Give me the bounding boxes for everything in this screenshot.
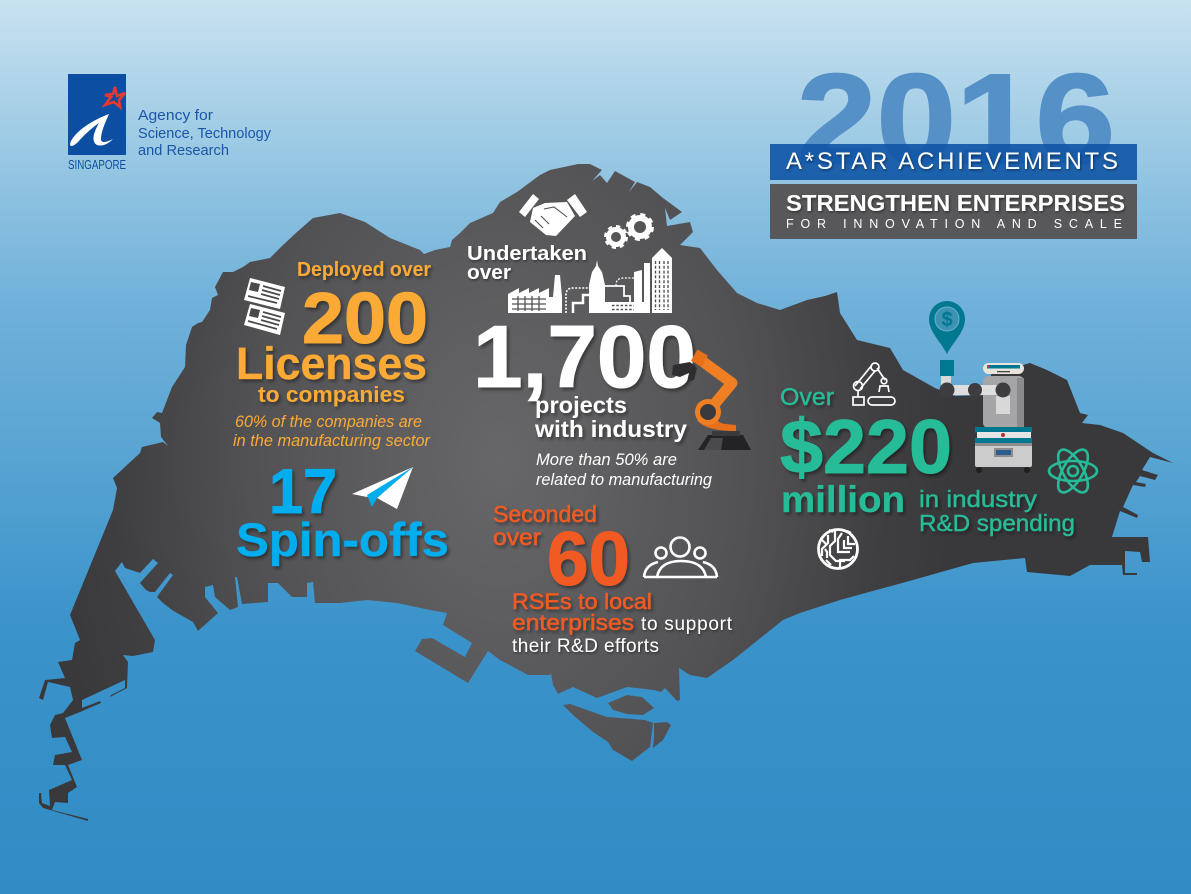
secondment detail: their R&D efforts bbox=[512, 636, 659, 657]
secondment detail bbox=[512, 614, 733, 657]
spending text: in industry bbox=[919, 486, 1038, 512]
banner: strengthen enterprises: STRENGTHEN ENTERPRISES bbox=[786, 190, 1125, 216]
banner: strengthen enterprises bbox=[770, 184, 1137, 239]
spending text: R&D spending bbox=[919, 510, 1075, 536]
number 1,700: 1,700 bbox=[473, 307, 696, 406]
agency name: Science, Technology bbox=[138, 125, 271, 142]
spending text: Over bbox=[780, 384, 834, 411]
projects text: projects bbox=[535, 392, 627, 418]
seconded text bbox=[493, 501, 652, 635]
projects text: with industry bbox=[534, 416, 687, 442]
agency name bbox=[138, 107, 271, 159]
title block bbox=[770, 48, 1137, 239]
spin-offs text: Spin-offs bbox=[236, 513, 449, 566]
secondment detail: to support bbox=[641, 614, 733, 635]
icon: robotic arm outline bbox=[853, 363, 895, 405]
seconded text: RSEs to local bbox=[512, 589, 652, 614]
licenses text: Deployed over bbox=[297, 259, 431, 281]
panel: R&D spending bbox=[780, 301, 1097, 568]
spin-offs text: 17 bbox=[269, 457, 337, 527]
licenses note: in the manufacturing sector bbox=[233, 432, 431, 450]
licenses text: Licenses bbox=[236, 338, 427, 389]
projects note: More than 50% are bbox=[536, 450, 677, 469]
icon: industrial skyline bbox=[508, 248, 672, 313]
seconded text: Seconded bbox=[493, 501, 597, 527]
icon: atom bbox=[1049, 445, 1097, 497]
icon: circuit globe bbox=[818, 530, 858, 568]
spending text bbox=[780, 384, 1075, 536]
map of Singapore bbox=[39, 164, 1173, 821]
icon: location pin with dollar bbox=[929, 301, 965, 354]
icon: documents bbox=[244, 278, 285, 335]
licenses note bbox=[233, 413, 431, 450]
icon: paper plane bbox=[352, 467, 413, 509]
undertaken text: Undertaken bbox=[467, 243, 587, 265]
agency name: and Research bbox=[138, 142, 229, 159]
seconded text: enterprises bbox=[512, 610, 634, 635]
licenses note: 60% of the companies are bbox=[235, 413, 422, 431]
projects text bbox=[534, 392, 687, 442]
undertaken text: over bbox=[467, 262, 511, 284]
panel: licenses bbox=[233, 259, 431, 450]
icon: orange robot arm bbox=[672, 349, 751, 450]
licenses text bbox=[236, 259, 431, 407]
banner: achievements: A*STAR ACHIEVEMENTS bbox=[786, 148, 1118, 175]
icon: location pin with dollar: $ bbox=[941, 309, 953, 331]
panel: spin-offs bbox=[236, 457, 449, 566]
projects note bbox=[536, 450, 713, 489]
logo wordmark SINGAPORE: SINGAPORE bbox=[68, 157, 126, 172]
icon: gears bbox=[606, 214, 652, 248]
spin-offs text bbox=[236, 457, 449, 566]
spending text: million bbox=[781, 479, 905, 520]
icon: service robot bbox=[940, 360, 1032, 473]
projects note: related to manufacturing bbox=[536, 470, 713, 489]
panel: secondment bbox=[493, 501, 733, 657]
licenses text: to companies bbox=[258, 382, 405, 407]
seconded text: 60 bbox=[547, 517, 630, 602]
agency name: Agency for bbox=[138, 107, 213, 124]
spending text: $220 bbox=[780, 405, 952, 490]
licenses text: 200 bbox=[302, 279, 428, 359]
undertaken text bbox=[467, 243, 587, 284]
banner: achievements bbox=[770, 144, 1137, 180]
icon: handshake bbox=[519, 194, 587, 236]
logo: A*STAR Singapore bbox=[68, 74, 271, 172]
seconded text: over bbox=[493, 524, 541, 550]
icon: people group bbox=[644, 538, 717, 577]
banner: strengthen enterprises: FOR INNOVATION AND SCALE bbox=[786, 217, 1122, 231]
logo mark bbox=[68, 74, 126, 155]
year 2016: 2016 bbox=[797, 48, 1115, 191]
panel: projects bbox=[467, 194, 751, 489]
